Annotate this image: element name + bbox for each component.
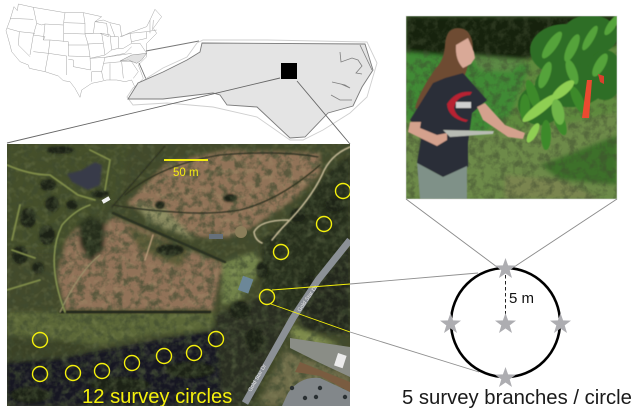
road labels: Gold Star Dr [248, 363, 268, 393]
aerial map panel [7, 144, 350, 408]
map: contiguous United States [6, 4, 162, 97]
connector lines from location square to aerial map [7, 78, 350, 144]
radius dashed line [504, 275, 506, 318]
orange flagging tape [582, 80, 592, 118]
diagram caption: 5 survey branches / circle [402, 387, 632, 409]
tree foliage [518, 13, 623, 150]
building roofs [238, 276, 253, 294]
stars: survey branches [440, 258, 571, 387]
survey circles label: 12 survey circles [82, 386, 232, 408]
road [245, 240, 350, 403]
connector lines from survey circle to branch diagram [350, 273, 479, 372]
map: North Carolina highlighted in the US outline [120, 53, 147, 63]
road labels [248, 285, 319, 393]
survey circles [32, 184, 350, 382]
location marker square [281, 63, 297, 79]
student [408, 28, 525, 199]
photo: student surveying a tree branch [406, 13, 623, 199]
connector lines from US map to North Carolina [139, 41, 199, 79]
paths and tree lines [7, 146, 350, 312]
road labels: Gold Star Dr [297, 285, 319, 313]
parking lot [282, 378, 350, 406]
yellow callout lines inside map [271, 284, 350, 332]
pond [67, 162, 102, 190]
map: North Carolina [127, 40, 377, 140]
gravel path [254, 147, 350, 243]
scale bar: 50 m [173, 167, 199, 179]
survey circle diagram [440, 258, 571, 387]
radius label: 5 m [509, 290, 534, 307]
connector lines from photo to top star [406, 199, 617, 267]
tree clusters [10, 146, 345, 403]
scale bar [164, 159, 208, 176]
